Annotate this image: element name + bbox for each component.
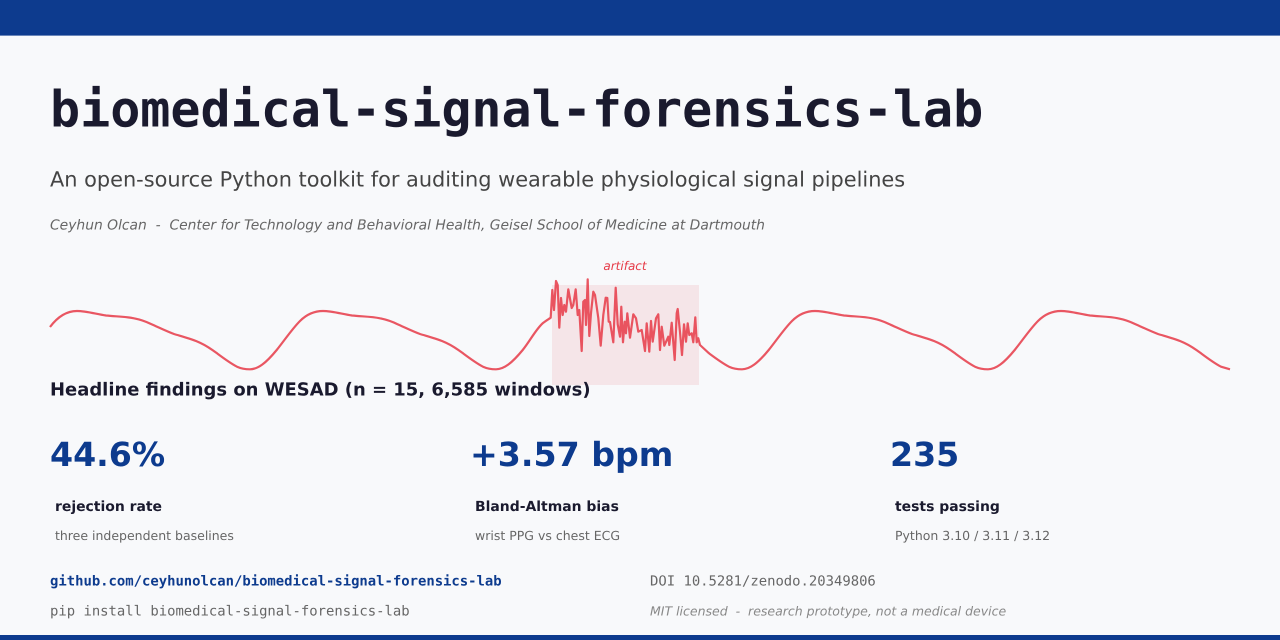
bottom bar	[0, 635, 1280, 640]
repository link: github.com/ceyhunolcan/biomedical-signal-forensics-lab	[50, 574, 502, 590]
stat: tests passing: Python 3.10 / 3.11 / 3.12	[895, 528, 1050, 543]
stat: Bland-Altman bias: +3.57 bpm	[470, 435, 673, 474]
stat: rejection rate: rejection rate	[55, 499, 162, 515]
license note: MIT licensed - research prototype, not a medical device	[650, 604, 1006, 619]
top bar	[0, 0, 1280, 36]
stat: Bland-Altman bias: Bland-Altman bias	[475, 499, 619, 515]
signal waveform with artifact	[50, 279, 1230, 369]
stat: tests passing	[890, 435, 1050, 543]
install command: pip install biomedical-signal-forensics-lab	[50, 604, 410, 620]
author line: Ceyhun Olcan - Center for Technology and Behavioral Health, Geisel School of Medicine at Dartmouth	[50, 217, 765, 233]
title: biomedical-signal-forensics-lab	[50, 81, 983, 139]
artifact label: artifact	[603, 259, 648, 273]
subtitle: An open-source Python toolkit for auditing wearable physiological signal pipelines	[50, 168, 905, 192]
DOI: DOI 10.5281/zenodo.20349806	[650, 574, 876, 590]
stat: rejection rate	[50, 435, 234, 543]
findings heading: Headline findings on WESAD (n = 15, 6,585 windows)	[50, 380, 591, 401]
artifact highlight band	[552, 285, 699, 385]
stat: tests passing: 235	[890, 435, 959, 474]
stat: rejection rate: three independent baselines	[55, 528, 234, 543]
stat: tests passing: tests passing	[895, 499, 1000, 515]
stat: Bland-Altman bias	[470, 435, 673, 543]
stat: rejection rate: 44.6%	[50, 435, 165, 474]
stat: Bland-Altman bias: wrist PPG vs chest ECG	[475, 528, 620, 543]
